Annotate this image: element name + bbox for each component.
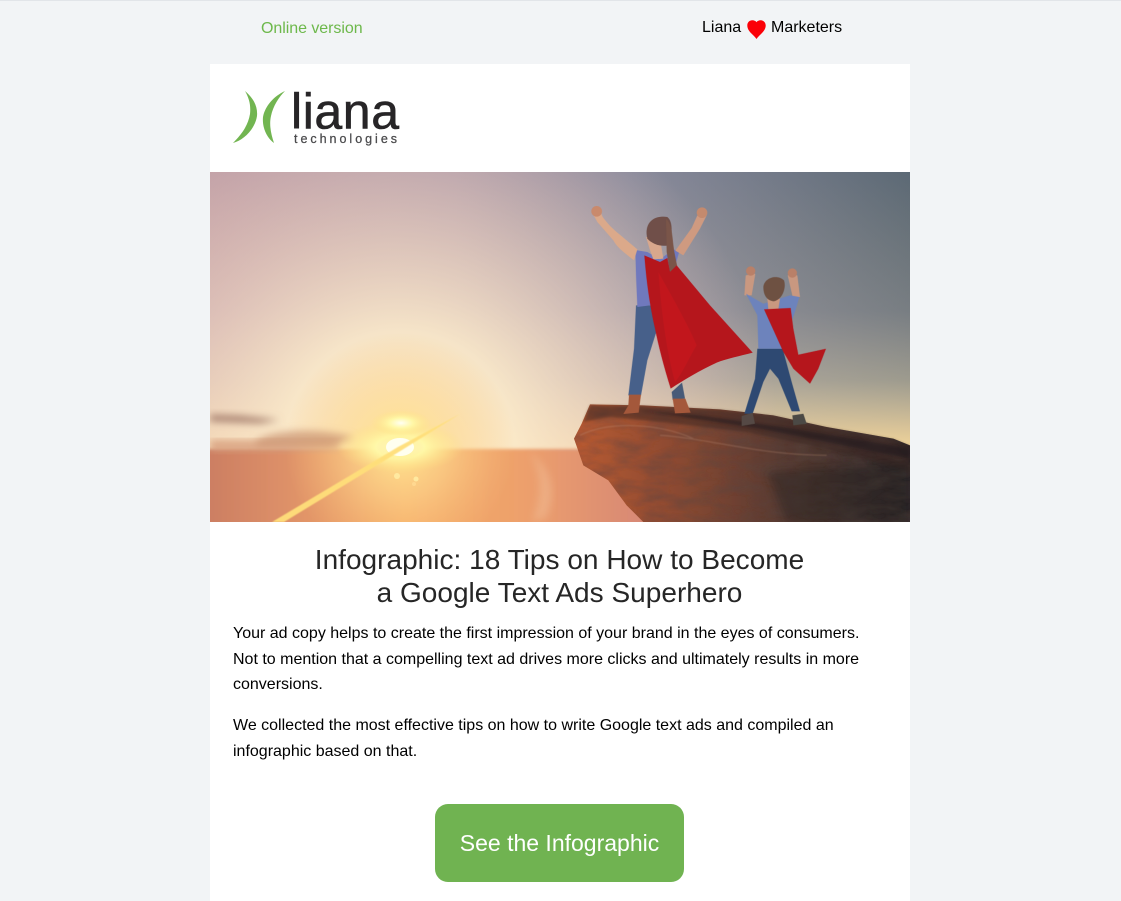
- header tagline: Liana loves Marketers: [702, 19, 842, 39]
- button: see the infographic: [435, 804, 684, 882]
- header tagline: Liana loves Marketers: Liana: [702, 19, 741, 36]
- second paragraph: [233, 717, 834, 760]
- header tagline: Liana loves Marketers: Marketers: [771, 19, 842, 36]
- button: see the infographic: See the Infographic: [460, 830, 659, 856]
- headline: a Google Text Ads Superhero: [377, 577, 742, 608]
- intro paragraph: [233, 625, 859, 693]
- logo: liana technologies: [233, 84, 400, 146]
- logo: liana technologies: liana: [291, 84, 399, 140]
- intro paragraph: Not to mention that a compelling text ad drives more clicks and ultimately results in more: [233, 650, 859, 668]
- boy: [744, 274, 755, 295]
- icon: red heart: [747, 20, 766, 39]
- intro paragraph: Your ad copy helps to create the first impression of your brand in the eyes of consumers.: [233, 625, 859, 642]
- intro paragraph: conversions.: [233, 676, 323, 693]
- girl: [591, 206, 826, 426]
- email card panel: [210, 64, 910, 901]
- rock: [574, 404, 910, 522]
- logo: liana technologies: technologies: [294, 132, 397, 146]
- headline: Infographic: 18 Tips on How to Become: [315, 544, 804, 575]
- second paragraph: We collected the most effective tips on how to write Google text ads and compiled an: [233, 717, 834, 734]
- second paragraph: infographic based on that.: [233, 742, 417, 760]
- header link: online version: Online version: [261, 20, 363, 37]
- hero image: children in superhero capes on a cliff at sunset: [210, 172, 910, 522]
- headline: [315, 544, 804, 608]
